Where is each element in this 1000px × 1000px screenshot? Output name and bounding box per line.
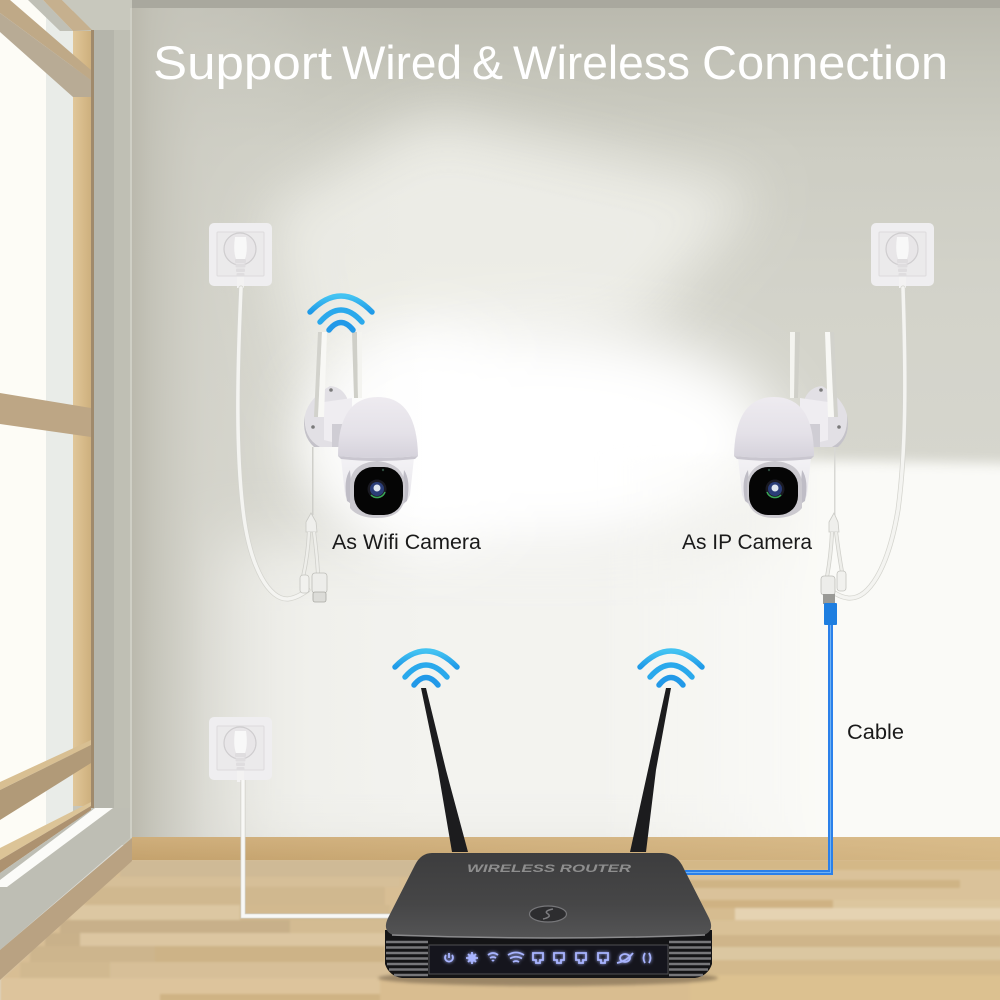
icon: wifi over left camera: [310, 296, 372, 330]
icon: wifi over router right antenna: [640, 651, 702, 685]
baseboard: [132, 837, 1000, 860]
title: Wireless: [513, 36, 690, 89]
router shadow: [378, 970, 718, 986]
router button: [530, 906, 566, 922]
floor: [0, 858, 1000, 1000]
outlet: bottom left: [209, 717, 272, 782]
window beam lower: [0, 740, 91, 820]
ceiling strip: [132, 0, 1000, 8]
router brand text: WIRELESS ROUTER: [467, 863, 631, 875]
led: lan 3: [576, 953, 586, 963]
label: as ip camera: As IP Camera: [682, 531, 812, 554]
window sill: [0, 802, 91, 873]
wall corner line: [130, 8, 132, 838]
title: Support: [153, 36, 332, 89]
label: as wifi camera: As Wifi Camera: [332, 531, 481, 554]
router vents left: [386, 942, 428, 975]
outlet: top left: [209, 223, 272, 288]
led: lan 1: [533, 953, 543, 963]
label: cable: Cable: [847, 721, 904, 744]
router top surface: [386, 853, 711, 938]
led: lan 2: [554, 953, 564, 963]
router front panel: [429, 945, 668, 974]
led: power: [445, 953, 453, 962]
window beam middle: [0, 393, 91, 437]
power cable: router: [243, 780, 392, 916]
ethernet cable (blue): [685, 603, 837, 872]
title: &: [472, 36, 503, 89]
router: [378, 853, 718, 986]
led: system: [466, 952, 478, 964]
router body front: [385, 930, 712, 978]
led: internet: [617, 953, 633, 963]
power cable: right camera: [826, 288, 905, 598]
router status LEDs: [445, 952, 650, 964]
led: wps: [644, 953, 650, 963]
router edge highlight: [392, 935, 705, 938]
router vents right: [669, 942, 711, 975]
title: Wired: [342, 36, 462, 89]
outlet: top right: [871, 223, 934, 288]
led: wifi 2g: [488, 953, 498, 961]
router antenna: left: [421, 688, 468, 852]
camera: right ip camera: [734, 332, 848, 518]
right splitter cable: [821, 447, 846, 604]
window and left wall: [0, 0, 132, 980]
router antenna: right: [630, 688, 671, 852]
title: Connection: [702, 36, 948, 89]
skirting left: [0, 838, 132, 980]
window beam top: [0, 0, 91, 97]
grey wall under the window: [0, 808, 130, 950]
camera: left wifi camera: [304, 332, 418, 518]
led: wifi 5g: [508, 952, 524, 962]
power cable: left camera: [238, 288, 308, 599]
window wood column: [73, 31, 91, 806]
led: lan 4: [598, 953, 608, 963]
window top reveal: [28, 0, 73, 31]
white sill strip: [0, 808, 113, 887]
left splitter cable: [300, 447, 327, 602]
icon: wifi over router left antenna: [395, 651, 457, 685]
